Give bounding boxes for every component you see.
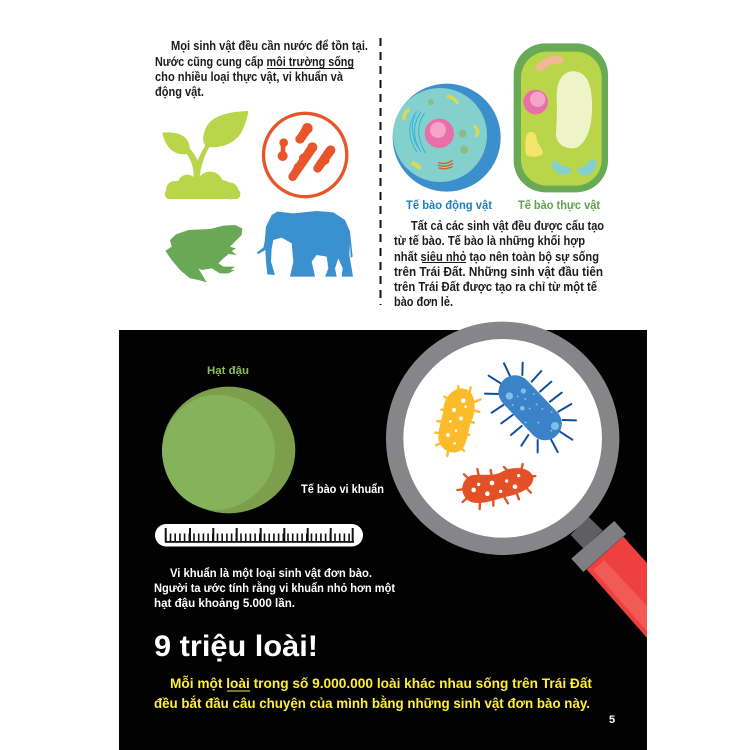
handle highlight — [594, 560, 647, 631]
text block: cells: từ tế bào. Tế bào là những khối hợp — [394, 234, 585, 248]
icon: animal cell — [393, 84, 501, 192]
text block: water intro: cho nhiều loại thực vật, vi khuẩn và — [155, 70, 343, 84]
text block: cells: Tất cả các sinh vật đều được cấu tạo — [411, 219, 604, 233]
red handle — [586, 536, 647, 638]
icon: frog silhouette — [165, 225, 242, 282]
text block: bacteria comparison: Người ta ước tính rằng vi khuẩn nhỏ hơn một — [154, 580, 395, 595]
heading: 9 million species: 9 triệu loài! — [154, 630, 318, 663]
bacterium: blue — [485, 363, 576, 452]
label: plant cell: Tế bào thực vật — [518, 198, 600, 212]
label: bacterial cell: Tế bào vi khuẩn — [301, 484, 384, 496]
text block: water intro — [155, 39, 368, 99]
icon: plant sprout — [162, 111, 248, 199]
bacterium: orange — [457, 464, 535, 509]
icon: bacteria in a circle — [263, 113, 347, 197]
label: animal cell: Tế bào động vật — [406, 198, 492, 212]
text block: bacteria comparison: hạt đậu khoảng 5.000 lần. — [154, 596, 295, 610]
text block: cells — [394, 219, 604, 309]
text block: water intro: động vật. — [155, 85, 204, 99]
icon: plant cell — [514, 43, 608, 192]
panel: black bacteria section — [119, 330, 713, 750]
bacterium: yellow — [435, 386, 481, 456]
handle collar — [571, 521, 626, 572]
icon: magnifying glass — [386, 322, 647, 638]
text block: cells: trên Trái Đất. Những sinh vật đầu tiên — [394, 265, 603, 279]
text block: water intro: Nước cũng cung cấp môi trường sống — [155, 55, 354, 69]
handle neck — [571, 517, 603, 548]
text block: bacteria comparison: Vi khuẩn là một loại sinh vật đơn bào. — [170, 566, 372, 580]
text block: cells: bào đơn lẻ. — [394, 295, 453, 309]
page number: 5 — [609, 714, 615, 726]
text block: cells: nhất siêu nhỏ tạo nên toàn bộ sự sống — [394, 250, 599, 264]
text block: yellow species statement: Mỗi một loài trong số 9.000.000 loài khác nhau sống trên Trái Đất — [170, 676, 592, 691]
text block: bacteria comparison — [154, 566, 395, 610]
text block: yellow species statement — [154, 676, 592, 711]
lens — [395, 330, 611, 546]
text block: yellow species statement: đều bắt đầu câu chuyện của mình bằng những sinh vật đơn bào này. — [154, 696, 590, 711]
divider: dashed line — [380, 38, 382, 305]
scale ruler — [155, 524, 363, 546]
text block: cells: trên Trái Đất được tạo ra chỉ từ một tế — [394, 280, 597, 294]
label: pea: Hạt đậu — [207, 365, 249, 377]
text block: water intro: Mọi sinh vật đều cần nước để tồn tại. — [171, 39, 368, 53]
icon: pea — [162, 387, 295, 513]
icon: elephant silhouette — [257, 211, 353, 277]
